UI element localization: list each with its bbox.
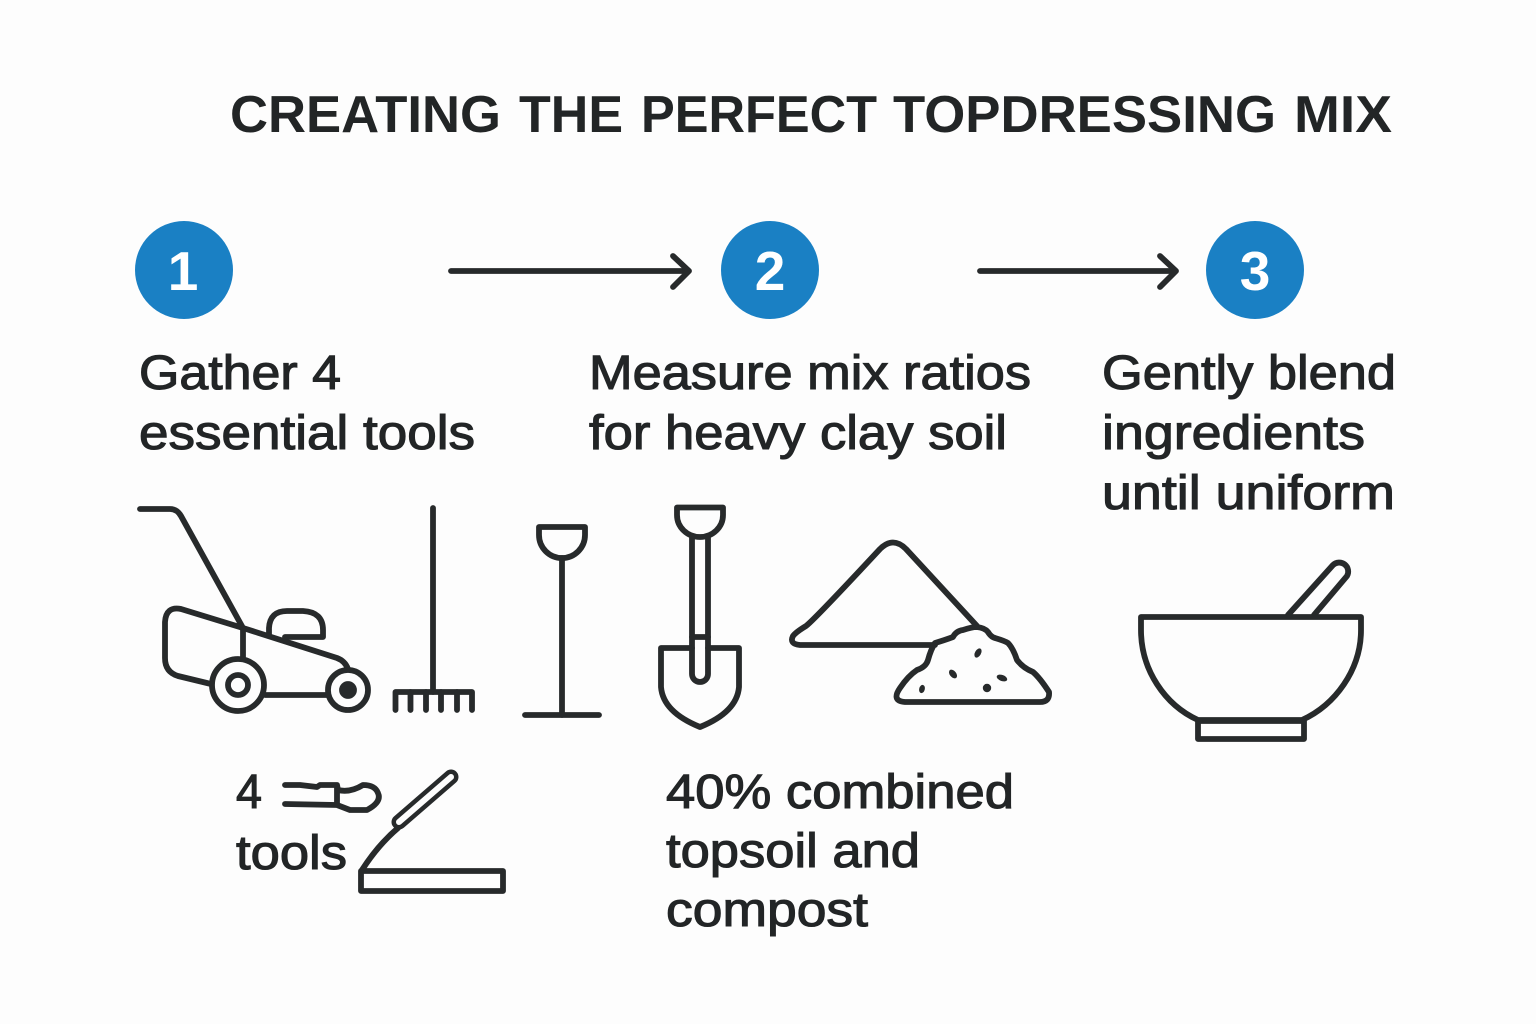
icon: small soil pile [896, 627, 1049, 702]
step 3 number badge [1206, 221, 1304, 319]
title: CREATING [230, 86, 501, 144]
stat: 4 tools: tools [236, 827, 347, 880]
icon: large sand pile [792, 542, 977, 645]
step 1 heading [139, 347, 475, 460]
icon: round-head spade on stand [525, 527, 599, 715]
icon: shovel [661, 508, 739, 727]
icon: hand pruner [285, 785, 379, 810]
icon: mixing bowl with spoon [1141, 563, 1361, 739]
icon: hoe [361, 777, 503, 891]
arrow: step 2 to step 3 [980, 256, 1176, 287]
step 3 heading: until uniform [1102, 467, 1395, 520]
step 1 heading: Gather 4 [139, 347, 341, 400]
stat: 4 tools [236, 766, 347, 880]
icon: lawn mower [140, 509, 368, 711]
title: PERFECT [641, 86, 877, 144]
stat: 40% combined topsoil and compost: compost [666, 884, 868, 937]
step 2 heading: for heavy clay soil [589, 407, 1007, 460]
step 2 heading: Measure mix ratios [589, 347, 1031, 400]
step 2 heading [589, 347, 1031, 460]
stat: 40% combined topsoil and compost: 40% combined [666, 766, 1014, 819]
step 1 number badge: 1 [168, 240, 198, 302]
step 2 number badge [721, 221, 819, 319]
step 3 heading: Gently blend [1102, 347, 1396, 400]
title: THE [519, 86, 623, 144]
title: TOPDRESSING [893, 86, 1276, 144]
title [230, 86, 1392, 144]
stat: 40% combined topsoil and compost: topsoil and [666, 825, 920, 878]
stat: 4 tools: 4 [236, 766, 262, 819]
step 1 heading: essential tools [139, 407, 475, 460]
title: MIX [1294, 86, 1392, 144]
step 3 heading [1102, 347, 1396, 520]
step 2 number badge: 2 [755, 240, 785, 302]
icon: rake [396, 508, 472, 710]
step 3 heading: ingredients [1102, 407, 1365, 460]
stat: 40% combined topsoil and compost [666, 766, 1014, 937]
arrow: step 1 to step 2 [451, 256, 689, 287]
step 1 number badge [135, 221, 233, 319]
step 3 number badge: 3 [1240, 240, 1270, 302]
